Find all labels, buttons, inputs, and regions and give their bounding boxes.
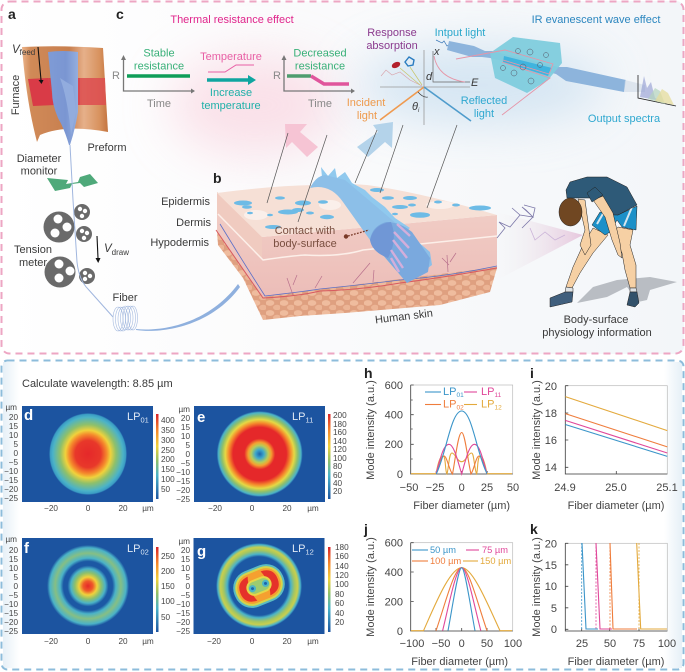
- heat map g: −20: [207, 637, 221, 646]
- heat map d: −5: [9, 458, 18, 467]
- chart h: mode intensity by LP mode: 12: [494, 404, 502, 412]
- heat map f: µm: [142, 637, 154, 646]
- chart j: intensity by fiber diameter: j: [363, 521, 368, 537]
- label: V feed: V: [12, 44, 21, 56]
- heat map d: 0: [86, 504, 91, 513]
- chart h: mode intensity by LP mode: LP: [481, 386, 494, 398]
- heat map g: 120: [335, 571, 349, 580]
- chart j: intensity by fiber diameter: 600: [385, 538, 403, 550]
- arrow: feed direction: [38, 47, 44, 84]
- heat map d: 50: [161, 485, 171, 494]
- panel a: fiber drawing: [8, 6, 240, 331]
- panel b: skin model: [150, 125, 677, 339]
- label: hypodermis: Hypodermis: [150, 237, 209, 249]
- heat map e: 20: [333, 487, 343, 496]
- heat map f: [4, 535, 175, 646]
- label: preform: Preform: [87, 142, 127, 154]
- chart j: intensity by fiber diameter: 400: [385, 567, 403, 579]
- heat map g: −15: [176, 609, 190, 618]
- heat map g: 20: [282, 637, 292, 646]
- heat map g: µm: [307, 637, 319, 646]
- chart i: zoomed mode intensity: 14: [545, 462, 557, 474]
- label: response absorption: Response: [367, 27, 417, 39]
- heat map f: 02: [140, 548, 149, 556]
- heat map g: 80: [335, 590, 345, 599]
- label: reflected light: Reflected: [461, 95, 507, 107]
- label: V feed: feed: [20, 48, 35, 57]
- icon: furnace: [22, 46, 108, 142]
- heat map g: µm: [178, 537, 190, 546]
- label: V draw: V: [104, 243, 113, 255]
- chart h: mode intensity by LP mode: 01: [456, 392, 464, 399]
- heat map f: 20: [118, 637, 128, 646]
- heat map g: 10: [181, 564, 190, 573]
- fiber to skin: [136, 284, 240, 331]
- chart h: mode intensity by LP mode: 25: [481, 482, 493, 494]
- heat map g: 5: [185, 573, 190, 582]
- heat map d: µm: [5, 403, 17, 412]
- heat map d: 200: [161, 455, 175, 464]
- heat map g: 0: [250, 637, 255, 646]
- chart k: cutoff detail: 50: [604, 638, 616, 650]
- diagram: reflection at interface: θ: [412, 101, 418, 113]
- heat map f: −15: [4, 609, 18, 618]
- heat map f: 10: [9, 564, 18, 573]
- chart j: intensity by fiber diameter: −50: [432, 638, 450, 650]
- illustration: skin block: [216, 184, 497, 320]
- chart: stable resistance: R: [112, 70, 120, 82]
- heat map e: 80: [333, 462, 343, 471]
- chart i: zoomed mode intensity: 20: [545, 381, 557, 393]
- temperature increase arrow: Increase: [210, 87, 252, 99]
- heat map f: −20: [4, 618, 18, 627]
- arrow: thermal pink: [285, 124, 318, 157]
- heat map g: −10: [176, 600, 190, 609]
- arrow: draw direction: [96, 236, 100, 263]
- chart: decreased resistance: [273, 48, 355, 110]
- chart k: cutoff detail: 0: [551, 624, 557, 636]
- chart k: cutoff detail: 100: [658, 638, 676, 650]
- label a: a: [8, 6, 16, 22]
- heat map d: 20: [9, 413, 18, 422]
- heat map f: LP: [127, 543, 140, 555]
- chart h: mode intensity by LP mode: 11: [494, 392, 502, 399]
- label: output spectra: Output spectra: [588, 113, 661, 125]
- chart j: intensity by fiber diameter: 50 µm: [430, 545, 456, 555]
- heat map f: −25: [4, 627, 18, 636]
- chart k: cutoff detail: 5: [551, 603, 557, 615]
- chart k: cutoff detail: 25: [576, 638, 588, 650]
- heat map e: 200: [333, 411, 347, 420]
- heat map g: 160: [335, 552, 349, 561]
- panel: top background: [1, 1, 684, 354]
- chart j: intensity by fiber diameter: [363, 521, 522, 668]
- chart: stable resistance: [112, 48, 195, 110]
- heat map e: 10: [181, 432, 190, 441]
- chart j: intensity by fiber diameter: 0: [397, 626, 403, 638]
- label: physiology information: physiology information: [542, 327, 652, 339]
- chart h: mode intensity by LP mode: 400: [385, 410, 403, 422]
- chart: output spectra: [638, 75, 676, 106]
- heat map d: 300: [161, 436, 175, 445]
- chart j: intensity by fiber diameter: 50: [481, 638, 493, 650]
- chart h: mode intensity by LP mode: LP: [443, 398, 456, 410]
- arrow: evanescent blue: [357, 122, 393, 157]
- heat map d: 250: [161, 446, 175, 455]
- heat map f: 100: [161, 597, 175, 606]
- chart: decreased resistance: resistance: [295, 60, 345, 72]
- heat map d: −15: [4, 476, 18, 485]
- chart h: mode intensity by LP mode: h: [364, 365, 373, 381]
- heat map e: 40: [333, 479, 343, 488]
- heat map f: 150: [161, 582, 175, 591]
- heat map e: LP: [292, 411, 305, 423]
- heat map g: −25: [176, 627, 190, 636]
- label: input light: Intput light: [435, 27, 485, 39]
- icon: diameter monitor: [47, 174, 98, 191]
- heat map g: −5: [181, 591, 190, 600]
- heat map d: 0: [13, 449, 18, 458]
- heat map e: −10: [176, 468, 190, 477]
- heat map f: 20: [9, 546, 18, 555]
- heat map d: 01: [140, 416, 149, 424]
- label: tension meter: meter: [19, 257, 47, 269]
- temperature increase arrow: [200, 51, 262, 112]
- label: epidermis: Epidermis: [161, 196, 210, 208]
- heat map g: 20: [181, 546, 190, 555]
- heat map d: −20: [4, 485, 18, 494]
- heat map g: g: [197, 543, 206, 560]
- heading: IR evanescent wave effect: IR evanescent wave effect: [532, 14, 660, 26]
- heading: thermal resistance effect: Thermal resistance effect: [170, 14, 294, 26]
- heat map d: −20: [44, 504, 58, 513]
- chart k: cutoff detail: 20: [545, 538, 557, 550]
- heat map f: 200: [161, 567, 175, 576]
- label: diameter monitor: Diameter: [17, 153, 61, 165]
- heat map e: 20: [181, 414, 190, 423]
- heat map d: 5: [13, 440, 18, 449]
- label c: c: [116, 6, 124, 22]
- label: response absorption: absorption: [366, 40, 418, 52]
- label: diameter monitor: monitor: [21, 166, 58, 178]
- chart: decreased resistance: Time: [308, 98, 332, 110]
- chart h: mode intensity by LP mode: 50: [507, 482, 519, 494]
- heat map d: µm: [142, 504, 154, 513]
- label: incident light: light: [357, 110, 377, 122]
- chart h: mode intensity by LP mode: 0: [459, 482, 465, 494]
- heat map f: 0: [13, 582, 18, 591]
- heat map f: 5: [13, 573, 18, 582]
- label: tension meter: Tension: [14, 244, 52, 256]
- chart k: cutoff detail: k: [530, 521, 538, 537]
- chart k: cutoff detail: 15: [545, 560, 557, 572]
- heat map f: −5: [9, 591, 18, 600]
- heat map e: 15: [181, 423, 190, 432]
- heat map g: [176, 537, 349, 646]
- heat map f: f: [24, 540, 30, 557]
- heat map d: −10: [4, 467, 18, 476]
- chart i: zoomed mode intensity: 24.9: [554, 482, 576, 494]
- heat map e: 0: [250, 504, 255, 513]
- chart i: zoomed mode intensity: i: [530, 365, 534, 381]
- chart k: cutoff detail: [530, 521, 676, 668]
- chart j: intensity by fiber diameter: −100: [400, 638, 424, 650]
- chart j: intensity by fiber diameter: 100: [504, 638, 522, 650]
- diagram: reflection at interface: d: [426, 71, 433, 83]
- chart h: mode intensity by LP mode: Fiber diameter (µm): [413, 500, 510, 512]
- chart k: cutoff detail: Fiber diameter (µm): [568, 656, 664, 668]
- chart h: mode intensity by LP mode: [364, 365, 519, 512]
- heat map e: −20: [208, 504, 222, 513]
- chart h: mode intensity by LP mode: 02: [456, 404, 464, 412]
- heat map f: µm: [5, 535, 17, 544]
- heat map d: d: [24, 407, 33, 424]
- heat map f: 0: [86, 637, 91, 646]
- heat map d: 150: [161, 465, 175, 474]
- panel c: sensing mechanisms: [112, 6, 676, 157]
- chart h: mode intensity by LP mode: −50: [400, 482, 418, 494]
- heat map e: 20: [282, 504, 292, 513]
- diagram: reflection at interface: E: [471, 77, 479, 89]
- heat map g: 40: [335, 609, 345, 618]
- chart h: mode intensity by LP mode: 600: [385, 380, 403, 392]
- heat map d: LP: [127, 411, 140, 423]
- heat map e: µm: [307, 504, 319, 513]
- light cone and molecule: [497, 205, 583, 280]
- heat map e: 140: [333, 437, 347, 446]
- chart h: mode intensity by LP mode: −25: [426, 482, 444, 494]
- heat map d: 400: [161, 416, 175, 425]
- chart i: zoomed mode intensity: 16: [545, 435, 557, 447]
- label: human skin: Human skin: [374, 308, 434, 326]
- heat map d: 15: [9, 422, 18, 431]
- heat map g: 12: [305, 548, 314, 556]
- illustration: person bending: [550, 177, 677, 307]
- label b: b: [213, 170, 222, 186]
- temperature increase arrow: Temperature: [200, 51, 262, 63]
- heat map g: 180: [335, 543, 349, 552]
- chart j: intensity by fiber diameter: Fiber diameter (µm): [411, 656, 508, 668]
- chart i: zoomed mode intensity: 18: [545, 408, 557, 420]
- panel: bottom background: [1, 360, 684, 670]
- heat map e: e: [197, 409, 205, 426]
- heat map f: −10: [4, 600, 18, 609]
- heat map g: −20: [176, 618, 190, 627]
- illustration: fiber on skin: [310, 167, 432, 283]
- diagram: reflection at interface: x: [433, 46, 440, 58]
- heat map d: −25: [4, 494, 18, 503]
- label: physiology information: Body-surface: [564, 314, 628, 326]
- icon: fiber coil: [113, 306, 138, 331]
- chart j: intensity by fiber diameter: 150 µm: [480, 556, 511, 566]
- heat map f: 50: [161, 613, 171, 622]
- chart h: mode intensity by LP mode: 0: [397, 469, 403, 481]
- heat map e: 11: [305, 416, 313, 424]
- heat map e: 0: [185, 450, 190, 459]
- chart j: intensity by fiber diameter: 100 µm: [430, 556, 461, 566]
- heat map g: LP: [292, 543, 305, 555]
- diagram: reflection at interface: [380, 46, 479, 125]
- heat map g: 20: [335, 618, 345, 627]
- chart i: zoomed mode intensity: Fiber diameter (µm): [568, 500, 664, 512]
- heat map f: 15: [9, 555, 18, 564]
- chart i: zoomed mode intensity: 25.0: [605, 482, 627, 494]
- shadow: [577, 277, 677, 303]
- heat map g: 100: [335, 580, 349, 589]
- diagram: tapered fiber in sample: [436, 37, 645, 115]
- heat map d: 10: [9, 431, 18, 440]
- fiber line: [70, 145, 113, 317]
- heat map e: 60: [333, 471, 343, 480]
- icon: tension rollers: [44, 204, 95, 288]
- heat map g: 140: [335, 562, 349, 571]
- callout: contact with body surface: Contact with: [275, 225, 335, 237]
- label: furnace: Furnace: [10, 75, 22, 115]
- heat map e: −25: [176, 495, 190, 504]
- chart h: mode intensity by LP mode: LP: [481, 398, 494, 410]
- diagram: reflection at interface: i: [418, 108, 420, 114]
- chart j: intensity by fiber diameter: 0: [459, 638, 465, 650]
- chart j: intensity by fiber diameter: 200: [385, 596, 403, 608]
- heat map g: 0: [185, 582, 190, 591]
- hair lines: [267, 125, 457, 222]
- chart h: mode intensity by LP mode: LP: [443, 386, 456, 398]
- heat map e: 120: [333, 445, 347, 454]
- chart j: intensity by fiber diameter: Mode intensity (a.u.): [365, 537, 377, 637]
- heat map e: µm: [178, 405, 190, 414]
- chart k: cutoff detail: 10: [545, 581, 557, 593]
- heading: calculate wavelength: Calculate wavelength: 8.85 µm: [22, 378, 173, 390]
- label: fiber: Fiber: [112, 292, 138, 304]
- heat map e: [176, 405, 347, 513]
- label: V draw: draw: [112, 248, 129, 257]
- chart j: intensity by fiber diameter: 75 µm: [482, 545, 508, 555]
- label: reflected light: light: [474, 108, 494, 120]
- chart i: zoomed mode intensity: [530, 365, 678, 512]
- heat map e: 180: [333, 420, 347, 429]
- icon: preform: [48, 51, 78, 145]
- heat map e: 5: [185, 441, 190, 450]
- heat map e: −20: [176, 486, 190, 495]
- chart: decreased resistance: R: [273, 70, 281, 82]
- heat map g: 60: [335, 599, 345, 608]
- heat map e: 100: [333, 454, 347, 463]
- heat map d: 20: [118, 504, 128, 513]
- chart h: mode intensity by LP mode: 200: [385, 439, 403, 451]
- chart h: mode intensity by LP mode: Mode intensity (a.u.): [365, 380, 377, 480]
- callout: contact with body surface: [273, 225, 369, 250]
- chart i: zoomed mode intensity: 25.1: [656, 482, 678, 494]
- callout: contact with body surface: body-surface: [273, 238, 337, 250]
- heat map f: 250: [161, 552, 175, 561]
- chart i: zoomed mode intensity: Mode intensity (a.u.): [531, 380, 543, 480]
- heat map d: 350: [161, 426, 175, 435]
- temperature increase arrow: temperature: [201, 100, 261, 112]
- chart k: cutoff detail: 75: [633, 638, 645, 650]
- chart: stable resistance: Time: [147, 98, 171, 110]
- label: dermis: Dermis: [176, 217, 211, 229]
- heat map g: 15: [181, 555, 190, 564]
- label: incident light: Incident: [347, 97, 385, 109]
- heat map d: 100: [161, 475, 175, 484]
- chart: decreased resistance: Decreased: [293, 48, 347, 60]
- chart: stable resistance: Stable: [143, 48, 175, 60]
- heat map e: 160: [333, 428, 347, 437]
- heat map e: −5: [181, 459, 190, 468]
- chart: stable resistance: resistance: [134, 60, 184, 72]
- heat map e: −15: [176, 477, 190, 486]
- heat map d: [4, 403, 175, 513]
- chart k: cutoff detail: Mode intensity (a.u.): [531, 537, 543, 637]
- heat map f: −20: [44, 637, 58, 646]
